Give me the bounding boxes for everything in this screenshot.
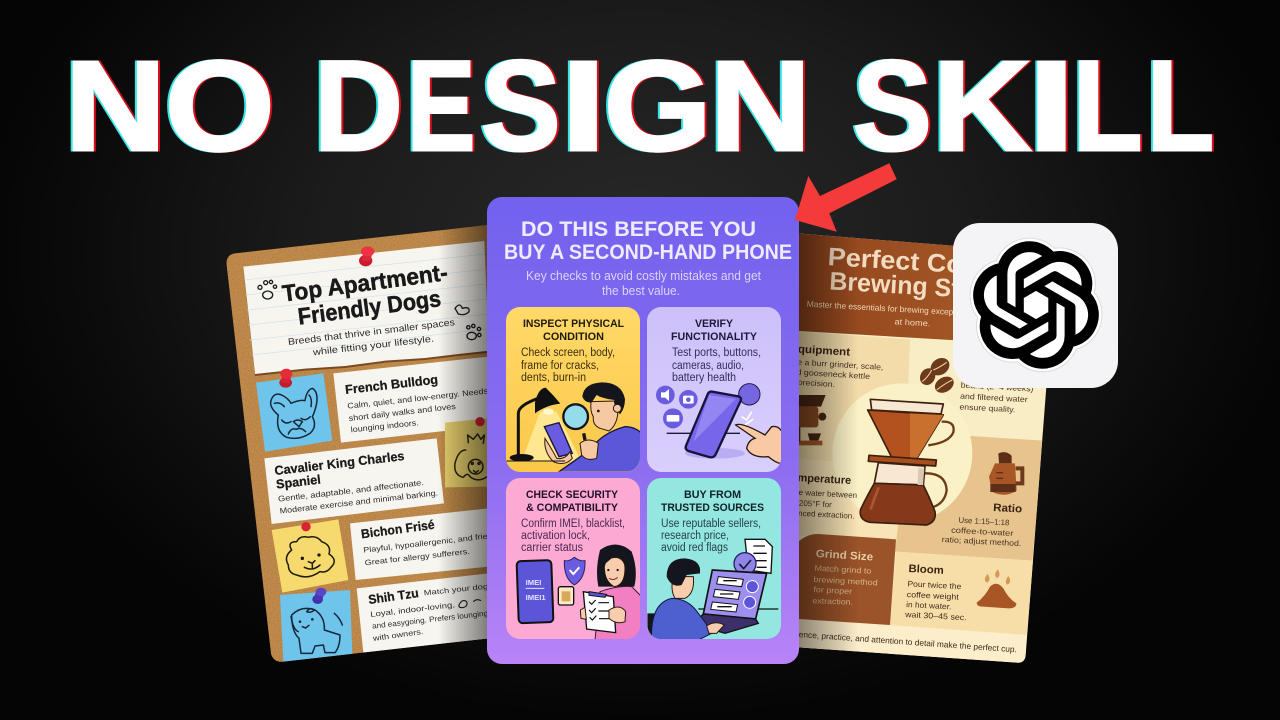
text: equipment: Use a burr grinder, scale, — [787, 357, 884, 372]
sub-panel: header band — [799, 234, 954, 340]
sub-panel: Shih Tzu: Shih Tzu — [367, 586, 420, 607]
panel: buy from trusted sources: research price, — [661, 530, 729, 542]
title: NO DESIGN SKILL: N — [65, 35, 166, 178]
text: bloom — [904, 563, 967, 622]
sub-panel: Cavalier King Charles Spaniel: Spaniel — [275, 473, 321, 492]
icon: ChatGPT app logo — [953, 223, 1118, 388]
sub-panel: Cavalier King Charles Spaniel: Moderate exercise and minimal barking. — [279, 488, 439, 516]
icon: paw left — [258, 280, 277, 299]
title: NO DESIGN SKILL: D — [314, 35, 403, 178]
icon: red pin french bulldog — [279, 369, 292, 388]
illustration: IMEI phone, shield and person with clipboard — [517, 545, 642, 640]
sticky: French Bulldog — [256, 373, 332, 452]
text: temperature: balanced extraction. — [783, 508, 855, 521]
sticky: Shih Tzu — [280, 590, 352, 662]
panel: check security and compatibility: carrier status — [521, 542, 583, 554]
heading: BUY A SECOND-HAND PHONE — [504, 240, 792, 264]
sub-panel: header band: Brewing Steps — [829, 267, 1003, 306]
subheading — [526, 269, 762, 298]
sub-panel: Shih Tzu: and easygoing. Prefers lounging — [372, 609, 488, 631]
text: grind size: brewing method — [813, 575, 878, 587]
text: grind size: extraction. — [812, 596, 853, 607]
text: fresh beans: ensure quality. — [959, 402, 1016, 414]
title: NO DESIGN SKILL: N — [710, 35, 811, 178]
sub-panel: Shih Tzu: Match your dog — [423, 582, 489, 597]
sub-panel: header paper: Top Apartment- — [281, 259, 449, 307]
text: ratio: Use 1:15–1:18 — [958, 516, 1010, 527]
panel: buy from trusted sources: Use reputable sellers, — [661, 518, 761, 530]
title: NO DESIGN SKILL: K — [932, 35, 1030, 178]
heading: DO THIS BEFORE YOU — [521, 217, 756, 241]
sub-panel: footer band — [788, 618, 1027, 663]
illustration: phone functions and pointing hand — [656, 384, 783, 464]
text: grind size: Match grind to — [814, 564, 872, 576]
sub-panel: header band: Master the essentials for brewing exceptional coffee — [807, 299, 999, 319]
icon: kettle ratio — [989, 452, 1022, 495]
illustration: IMEI phone, shield and person with clipboard: IMEI1 — [526, 593, 546, 602]
text: bloom: coffee weight — [907, 590, 960, 602]
icon: red pin cavalier — [475, 417, 485, 426]
sub-panel: header paper: Friendly Dogs — [296, 285, 442, 330]
panel: check security and compatibility: CHECK SECURITY — [526, 489, 619, 501]
text: fresh beans — [959, 381, 1034, 414]
illustration: pour-over dripper and carafe — [860, 399, 954, 525]
panel: inspect physical condition: INSPECT PHYSICAL — [523, 318, 624, 330]
panel: check security and compatibility: activation lock, — [521, 530, 590, 542]
illustration: person inspecting phone — [507, 382, 642, 473]
panel: inspect physical condition: dents, burn-in — [521, 372, 586, 384]
text: ratio — [942, 502, 1023, 548]
subheading: the best value. — [602, 284, 680, 298]
panel: inspect physical condition: Check screen, body, — [521, 347, 615, 359]
text: fresh beans: and filtered water — [960, 392, 1028, 404]
title: NO DESIGN SKILL: O — [164, 35, 274, 178]
heading — [504, 217, 792, 264]
panel: buy from trusted sources: BUY FROM — [684, 489, 741, 501]
panel: inspect physical condition — [506, 307, 642, 473]
icon: red pin top — [359, 246, 374, 266]
sub-panel: Bichon Frise: Great for allergy sufferers. — [364, 547, 470, 567]
icon: bloom coffee pile — [977, 569, 1016, 608]
panel: verify functionality: FUNCTIONALITY — [671, 331, 758, 343]
icon: coffee beans — [920, 358, 954, 393]
panel: inspect physical condition: frame for cracks, — [521, 360, 599, 372]
title: NO DESIGN SKILL: L — [1146, 35, 1213, 178]
text: ratio: coffee-to-water — [951, 526, 1014, 538]
text: temperature — [799, 475, 857, 519]
sub-panel: header band: at home. — [894, 316, 931, 328]
subheading: Key checks to avoid costly mistakes and get — [526, 269, 762, 283]
icon: paw right — [455, 305, 481, 340]
sub-panel: Cavalier King Charles Spaniel — [264, 438, 444, 524]
sub-panel: Bichon Frise: Bichon Frisé — [360, 518, 435, 541]
text: grind size: Grind Size — [815, 548, 873, 563]
text: grind size — [812, 548, 878, 607]
illustration: IMEI phone, shield and person with clipboard: IMEI — [526, 578, 541, 587]
text: bloom: wait 30–45 sec. — [904, 610, 967, 622]
text: footer tagline: Patience, practice, and attention to detail make the perfect cup. — [784, 628, 1017, 654]
sub-panel: Bichon Frise: Playful, hypoallergenic, and friendly. — [363, 529, 506, 555]
sub-panel: grind size tile — [788, 534, 896, 625]
text: bloom: in hot water. — [906, 600, 952, 611]
sub-panel: header band: Perfect Coffee — [827, 243, 1012, 282]
text: grind size: for proper — [813, 585, 853, 596]
text: ratio: Ratio — [993, 502, 1023, 516]
title: NO DESIGN SKILL: E — [406, 35, 475, 178]
icon: grinder — [799, 395, 826, 446]
icon: purple pin — [312, 588, 326, 604]
sub-panel: French Bulldog: Calm, quiet, and low-energy. Needs — [347, 386, 488, 411]
title: NO DESIGN SKILL: I — [1028, 35, 1074, 178]
text: ratio: ratio; adjust method. — [942, 535, 1022, 548]
sticky: Cavalier — [445, 418, 488, 487]
panel: coffee brewing poster — [799, 234, 1046, 663]
sub-panel: equipment tile — [799, 332, 910, 462]
sub-panel: French Bulldog: short daily walks and loves — [348, 402, 456, 423]
sub-panel: French Bulldog: French Bulldog — [344, 373, 439, 397]
sub-panel: temperature tile — [799, 460, 898, 540]
sub-panel: Bichon Frise — [350, 508, 487, 580]
title: NO DESIGN SKILL — [65, 35, 1214, 178]
text: temperature: Temperature — [785, 472, 851, 487]
text: equipment: for precision. — [785, 377, 835, 389]
panel: apartment dogs corkboard poster — [226, 225, 487, 662]
sub-panel: Shih Tzu: Loyal, indoor-loving, — [370, 600, 455, 619]
panel: buy from trusted sources: TRUSTED SOURCES — [661, 502, 764, 514]
title: NO DESIGN SKILL: S — [481, 35, 560, 178]
panel: check security and compatibility: Confirm IMEI, blacklist, — [521, 518, 625, 530]
panel: verify functionality: Test ports, buttons, — [672, 347, 761, 359]
illustration: person buying on laptop — [647, 539, 778, 640]
panel: check security and compatibility — [506, 478, 642, 640]
sub-panel: Shih Tzu — [357, 573, 489, 653]
text: equipment — [799, 346, 882, 387]
title: NO DESIGN SKILL: S — [853, 35, 931, 178]
panel: verify functionality — [647, 307, 783, 472]
sub-panel: header paper — [243, 241, 489, 376]
text: bloom: Pour twice the — [907, 579, 962, 591]
text: equipment: Equipment — [790, 343, 851, 359]
panel: second-hand phone poster — [487, 197, 799, 664]
sub-panel: bloom tile — [890, 552, 1034, 635]
text: temperature: 195–205°F for — [781, 498, 832, 509]
text: temperature: Use water between — [789, 487, 857, 500]
text: fresh beans: beans (2–4 weeks) — [961, 381, 1034, 393]
panel: check security and compatibility: & COMPATIBILITY — [526, 502, 619, 514]
sub-panel: Cavalier King Charles Spaniel: Gentle, adaptable, and affectionate. — [278, 478, 424, 504]
panel: verify functionality: VERIFY — [695, 318, 734, 330]
text: equipment: and gooseneck kettle — [787, 367, 871, 381]
sub-panel: French Bulldog: lounging indoors. — [350, 418, 419, 434]
title: NO DESIGN SKILL: I — [561, 35, 606, 178]
title: NO DESIGN SKILL: L — [1073, 35, 1142, 178]
panel: buy from trusted sources — [647, 478, 781, 640]
panel: verify functionality: cameras, audio, — [672, 360, 744, 372]
arrow: red pointer — [795, 163, 897, 232]
sub-panel: Cavalier King Charles Spaniel: Cavalier King Charles — [274, 449, 405, 478]
sub-panel: ratio tile — [895, 436, 1043, 561]
sub-panel: header paper: Breeds that thrive in smaller spaces — [287, 317, 456, 347]
sticky: Bichon — [272, 519, 348, 593]
sub-panel: header paper: while fitting your lifestyle. — [311, 334, 434, 357]
text: bloom: Bloom — [908, 563, 944, 577]
title: NO DESIGN SKILL: G — [604, 35, 712, 178]
sub-panel: French Bulldog — [333, 357, 488, 443]
illustration backdrop circle — [832, 383, 972, 523]
panel: buy from trusted sources: avoid red flags — [661, 542, 728, 554]
sub-panel: Shih Tzu: with owners. — [371, 627, 424, 643]
icon: red pin bichon — [301, 522, 311, 531]
panel: inspect physical condition: CONDITION — [543, 331, 604, 343]
panel: verify functionality: battery health — [672, 372, 736, 384]
